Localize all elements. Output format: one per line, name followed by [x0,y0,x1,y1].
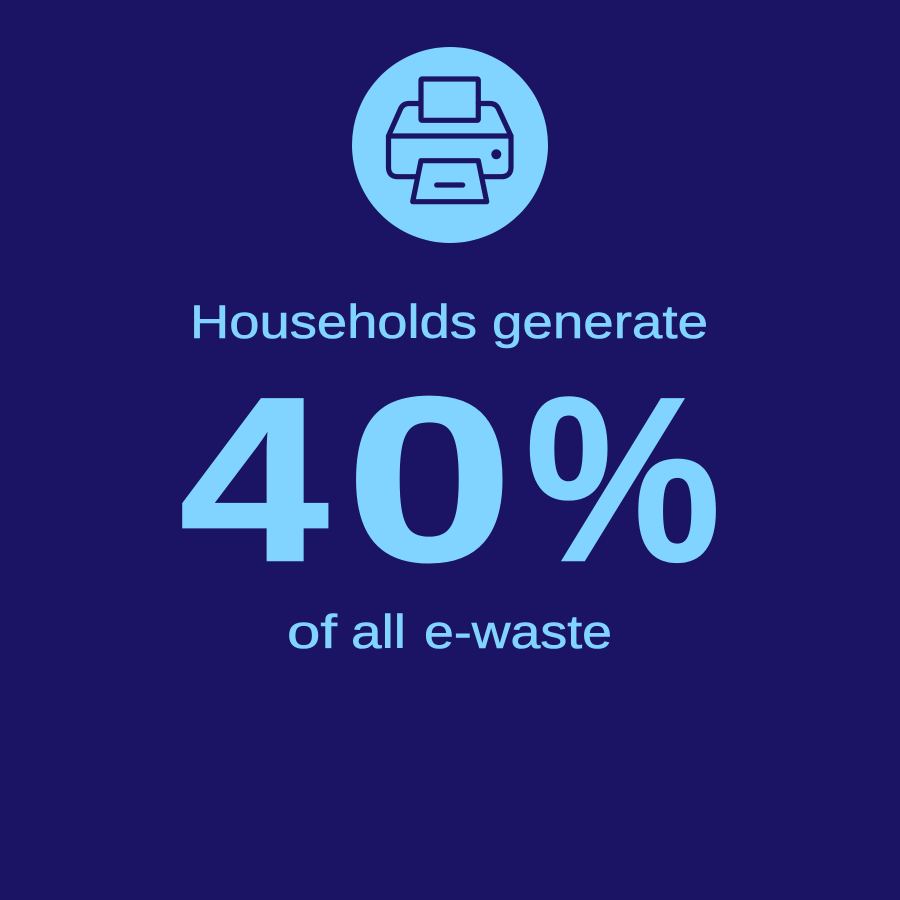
big number: 40%: % [525,348,721,610]
heading: households generate: Households [190,295,477,348]
subheading: of all e-waste: of [287,605,338,658]
big number: 40%: 4 [179,348,329,610]
subheading: of all e-waste: all [351,605,406,658]
icon: printer in circle [352,47,548,243]
subheading: of all e-waste [287,605,612,658]
heading: households generate: generate [492,295,708,348]
big number: 40% [179,348,721,610]
big number: 40%: 0 [345,348,514,610]
heading: households generate [190,295,708,348]
subheading: of all e-waste: e-waste [424,605,612,658]
